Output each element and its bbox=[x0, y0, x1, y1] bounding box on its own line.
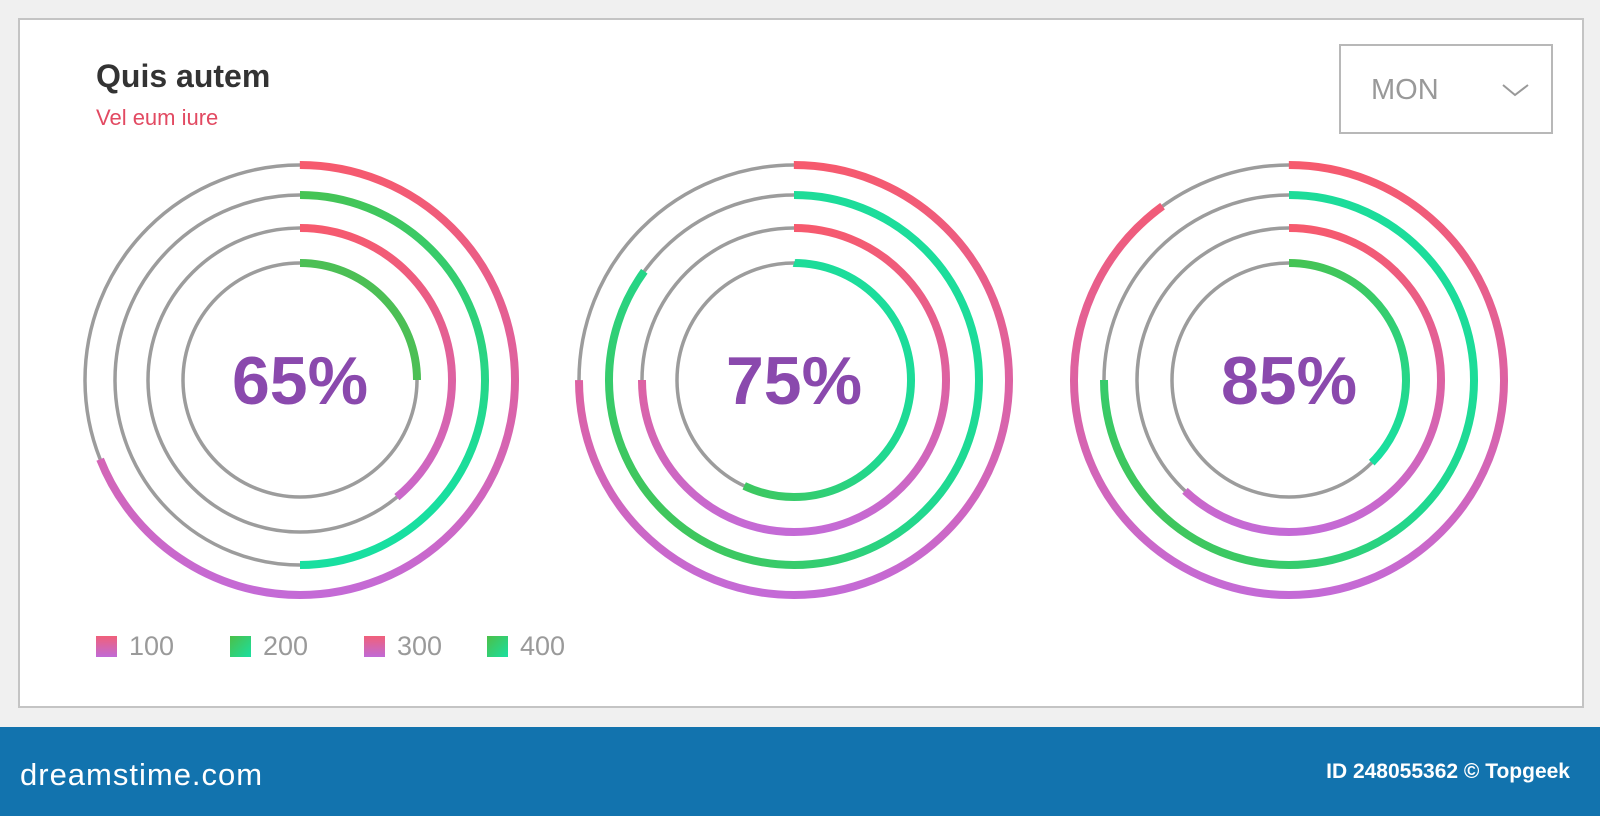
title: Quis autem bbox=[96, 58, 270, 94]
chart 3: 85% bbox=[1074, 165, 1504, 595]
value 65%: 65% bbox=[232, 343, 368, 419]
legend: 400 bbox=[520, 631, 565, 661]
chart 2: 75% bbox=[579, 165, 1009, 595]
legend: 100 bbox=[129, 631, 174, 661]
dropdown: MON: MON bbox=[1371, 74, 1439, 106]
value 85%: 85% bbox=[1221, 343, 1357, 419]
subtitle: Vel eum iure bbox=[96, 105, 218, 130]
footer bar bbox=[0, 727, 1600, 816]
legend bbox=[96, 631, 565, 661]
dropdown: MON bbox=[1339, 44, 1553, 134]
chart 1: 65% bbox=[85, 165, 515, 595]
footer logo text: dreamstime.com bbox=[20, 757, 263, 792]
footer credit: ID 248055362 © Topgeek bbox=[1326, 760, 1570, 783]
legend: 200 bbox=[263, 631, 308, 661]
legend: 300 bbox=[397, 631, 442, 661]
value 75%: 75% bbox=[726, 343, 862, 419]
